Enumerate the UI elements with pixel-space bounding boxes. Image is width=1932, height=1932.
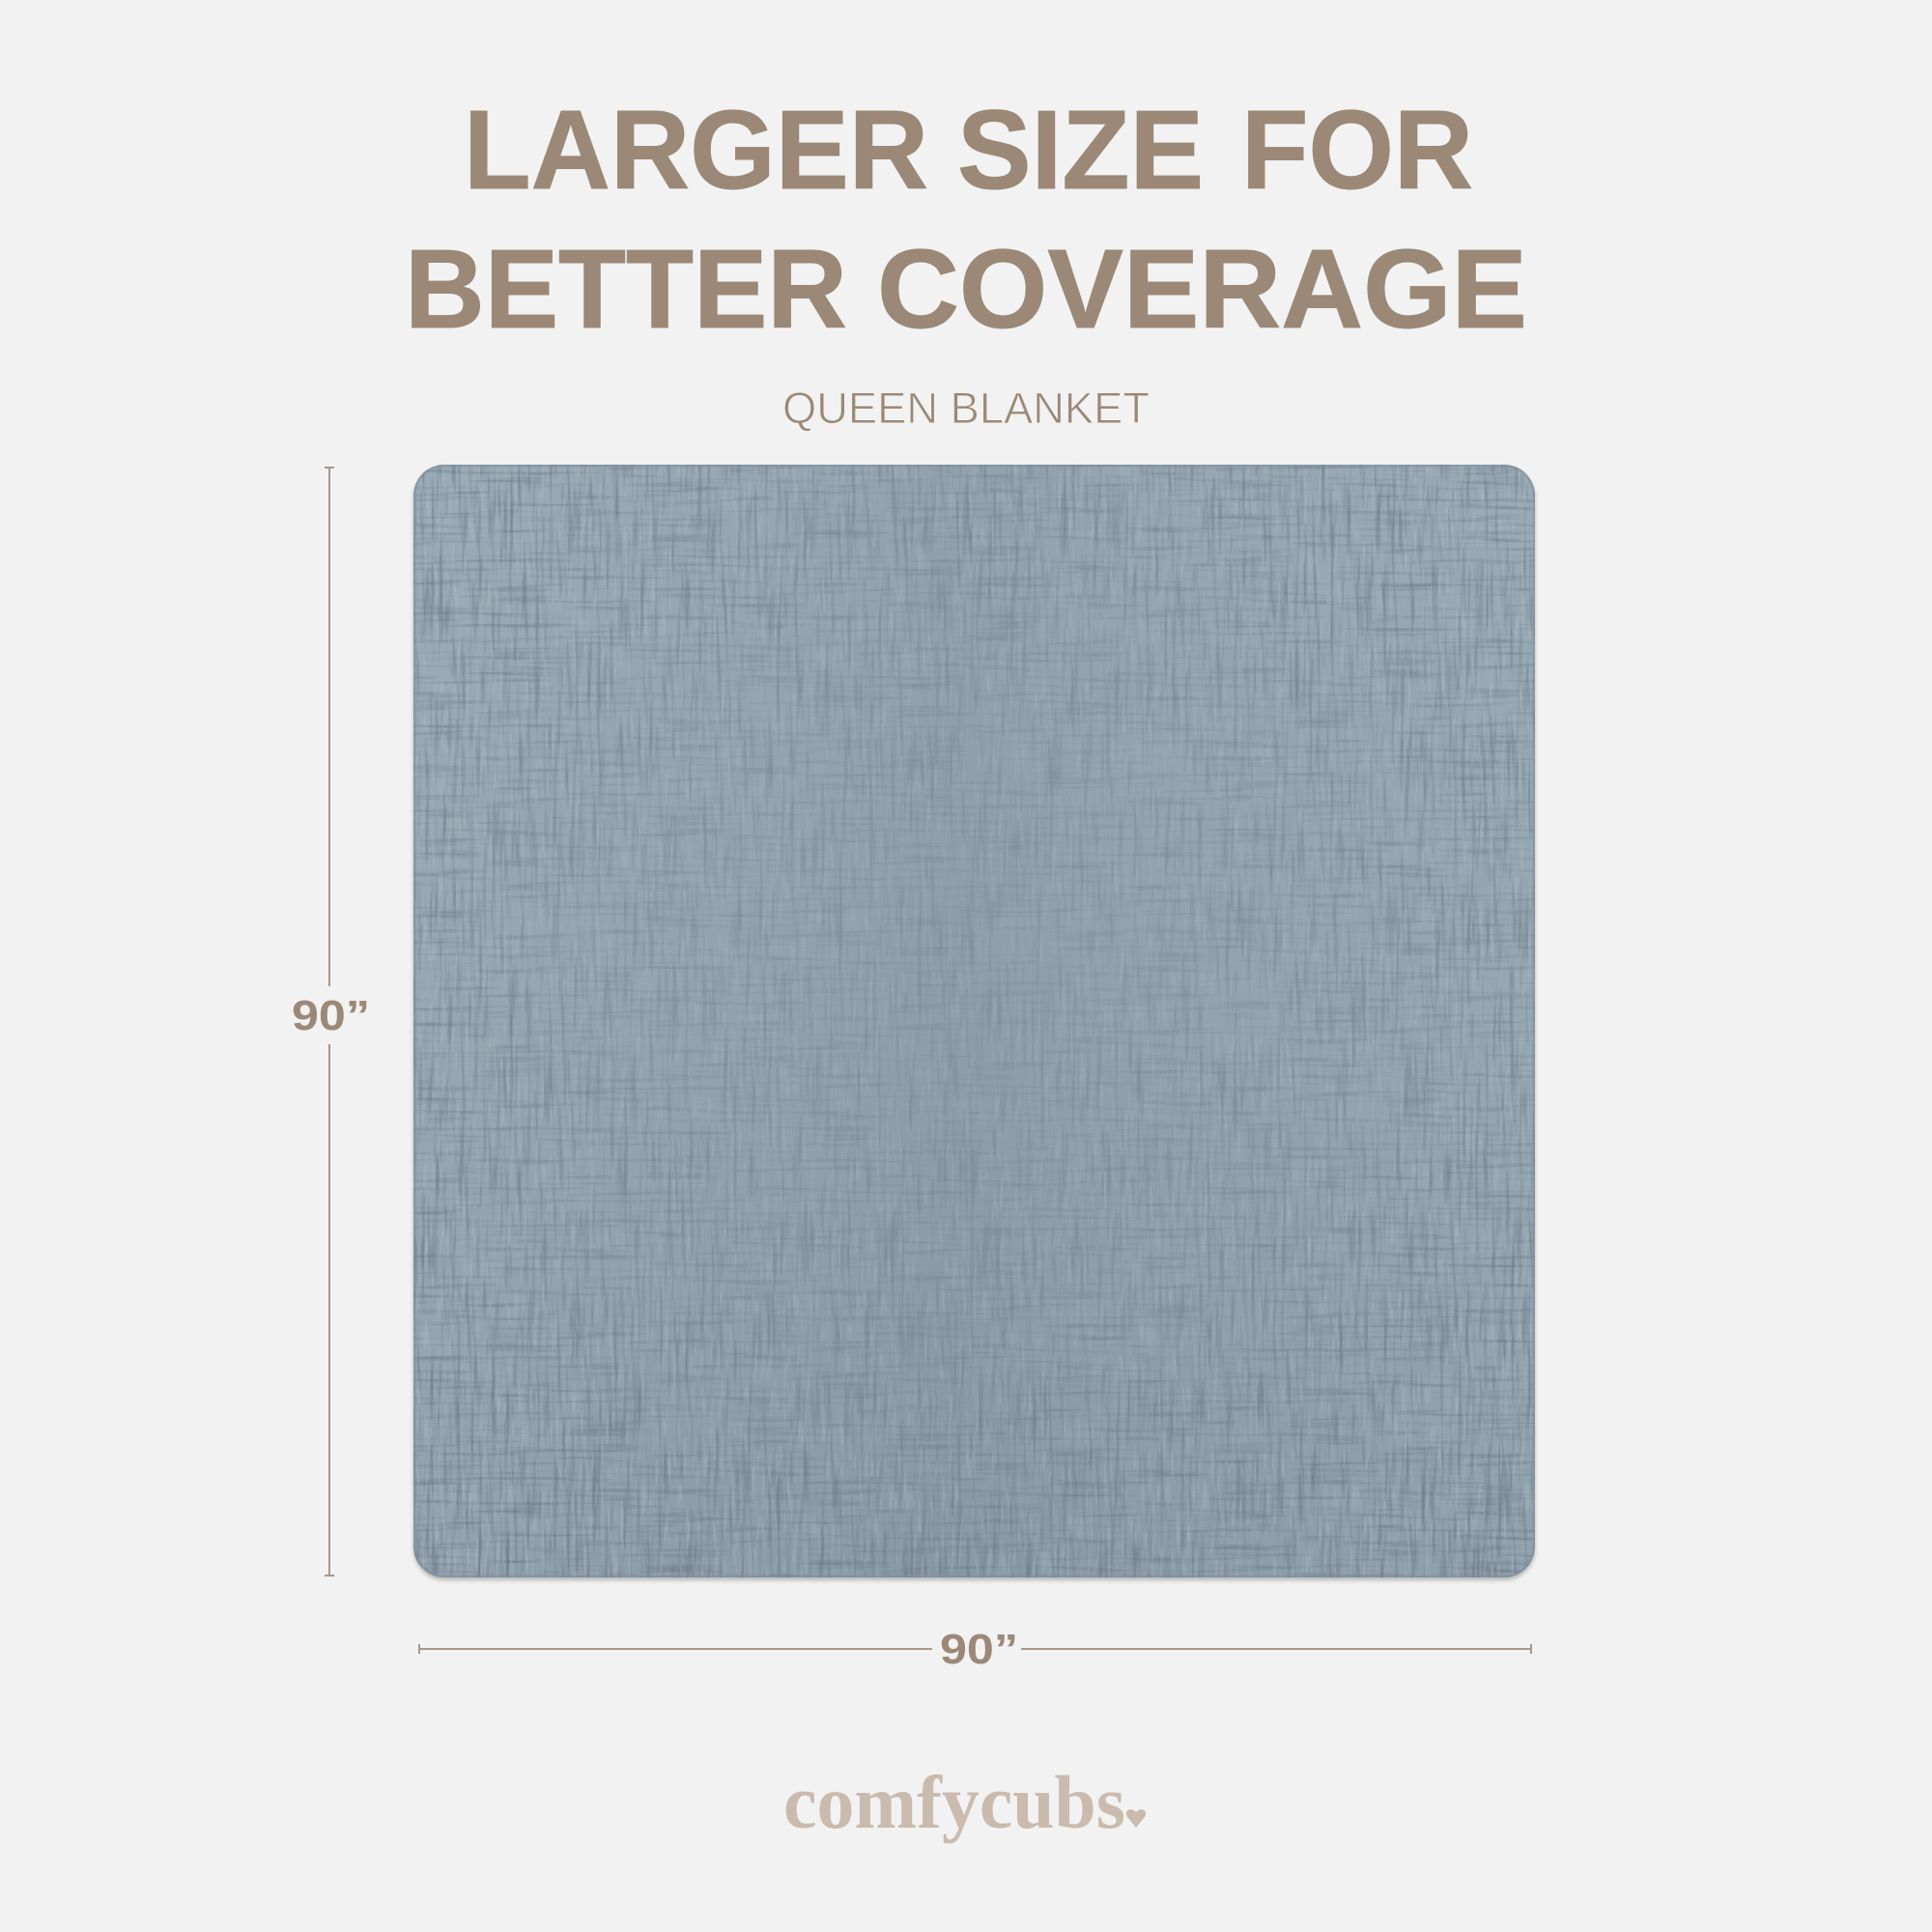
title: FOR <box>1241 87 1473 213</box>
title <box>405 87 1527 352</box>
vertical dimension: 90 inches: 90” <box>292 992 370 1039</box>
subtitle: QUEEN BLANKET <box>782 384 1150 433</box>
brand logo: comfycubs <box>783 1760 1125 1844</box>
horizontal dimension: 90 inches <box>419 1626 1531 1673</box>
blanket image <box>413 464 1535 1580</box>
title: LARGER <box>464 87 928 213</box>
horizontal dimension: 90 inches: 90” <box>940 1626 1018 1673</box>
title: BETTER <box>405 226 847 352</box>
title: SIZE <box>957 87 1204 213</box>
title: COVERAGE <box>877 226 1527 352</box>
icon: heart <box>1126 1809 1146 1828</box>
vertical dimension: 90 inches <box>292 468 370 1576</box>
